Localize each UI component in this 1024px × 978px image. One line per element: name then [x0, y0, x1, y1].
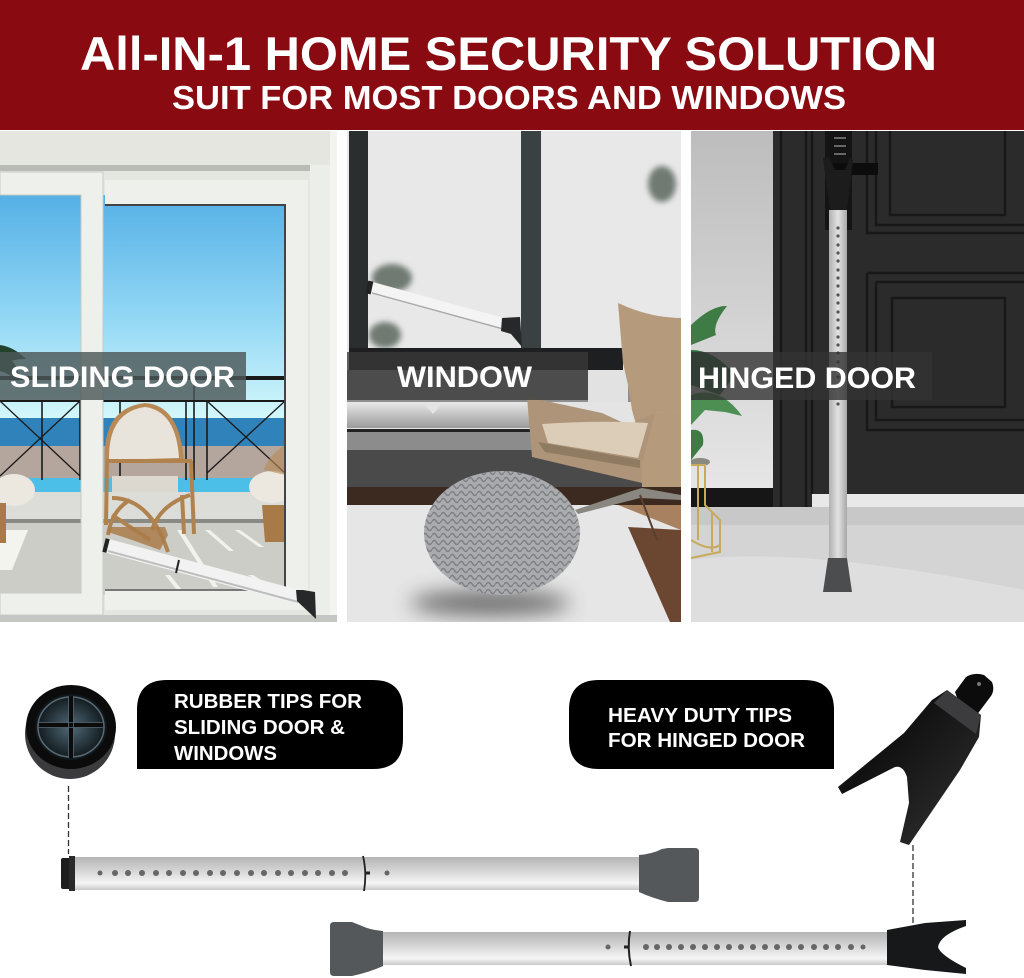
panel: window — [347, 131, 681, 622]
railing — [0, 378, 285, 480]
header banner — [0, 0, 1024, 130]
callout: heavy duty tips — [569, 680, 834, 769]
callout: heavy duty tips: HEAVY DUTY TIPS — [608, 705, 792, 727]
balcony scene — [0, 195, 285, 595]
label: sliding door — [0, 352, 246, 400]
lock and handle — [825, 131, 878, 230]
plant and gold pot — [690, 306, 742, 558]
knitted pouf — [424, 471, 580, 595]
dashed connector: fork tip — [912, 845, 914, 923]
wicker chair — [105, 403, 194, 552]
security bar: rubber tip version — [61, 848, 699, 902]
security bar: fork tip version — [330, 920, 966, 976]
sash: left sliding panel — [0, 172, 103, 615]
callout: rubber tips: WINDOWS — [174, 743, 277, 765]
label: hinged door — [691, 352, 932, 400]
label: window: WINDOW — [397, 361, 533, 394]
sash: right sliding panel — [105, 180, 308, 610]
title: All-IN-1 HOME SECURITY SOLUTION — [80, 27, 937, 80]
dashed connector: rubber tip — [68, 786, 70, 854]
armchair — [527, 303, 681, 540]
label: hinged door: HINGED DOOR — [698, 362, 916, 395]
blurred trees — [369, 166, 676, 348]
panel: hinged door — [690, 131, 1024, 622]
callout: heavy duty tips: FOR HINGED DOOR — [608, 730, 806, 752]
security bar against door — [823, 157, 853, 592]
callout: rubber tips: SLIDING DOOR & — [174, 717, 345, 739]
icon: rubber tip — [25, 685, 116, 779]
door frame and mouldings — [781, 131, 1024, 507]
right and left chairs — [0, 445, 295, 543]
label: sliding door: SLIDING DOOR — [10, 361, 235, 394]
label: window — [347, 352, 588, 400]
window frame — [349, 131, 623, 371]
subtitle: SUIT FOR MOST DOORS AND WINDOWS — [172, 79, 846, 116]
security bar in door track — [104, 545, 316, 619]
window seat and pillows — [347, 402, 681, 506]
icon: heavy duty fork tip — [838, 674, 993, 845]
panel: sliding door — [0, 131, 337, 622]
rug and floor — [347, 505, 681, 622]
callout: rubber tips — [137, 680, 403, 769]
security bar in window — [367, 287, 522, 347]
callout: rubber tips: RUBBER TIPS FOR — [174, 691, 363, 713]
